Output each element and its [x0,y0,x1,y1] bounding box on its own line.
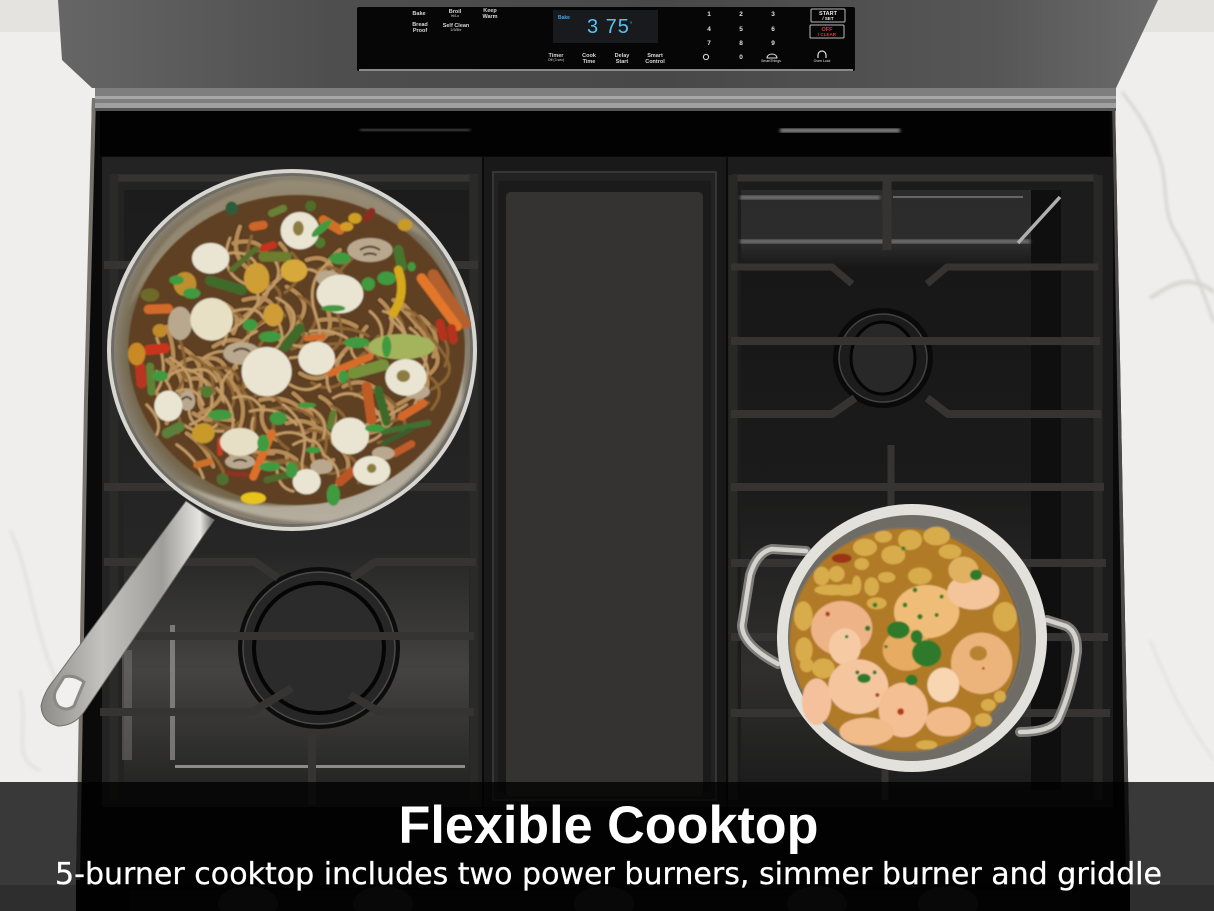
mode button labels: Smart [647,53,663,59]
squid tentacles [168,238,430,474]
keypad: 9 [771,40,775,47]
mode button labels: Keep [483,8,497,14]
garlic pieces [794,527,1017,750]
mode button labels: Control [645,59,665,65]
burner: left front power burner [238,567,400,729]
temperature display [553,10,658,43]
scallops [154,212,427,494]
keypad: 7 [707,40,711,47]
pot rim [777,504,1047,772]
subtitle: 5-burner cooktop includes two power burners, simmer burner and griddle [55,857,1162,892]
temperature display: Bake [558,15,570,21]
mode button labels: Cook [582,53,597,59]
mode button labels: 2/3/5hr [451,28,462,32]
pot handles [742,549,1077,732]
mode button labels: Proof [413,28,427,34]
knobs row [130,886,1080,911]
front trim strip [95,88,1116,156]
griddle [484,157,726,807]
start and off buttons [810,9,845,38]
pan rim [107,169,477,531]
mode button labels: Self Clean [443,23,470,29]
keypad: 0 [739,54,743,61]
mode button labels: Off (3 sec) [548,58,564,62]
keypad: 1 [707,11,711,18]
mode button labels: Bread [412,22,428,28]
pan food [128,195,465,506]
keypad [703,11,831,63]
start and off buttons: / SET [822,16,834,21]
title: Flexible Cooktop [398,796,818,855]
right grate [731,175,1110,800]
pan with noodle stir-fry [41,169,477,726]
noodles [157,227,438,480]
left grate [100,175,478,805]
keypad: 4 [707,26,711,33]
parsley [845,546,982,685]
right burner well [728,157,1113,807]
mode button labels: Time [583,59,595,65]
vegetables [140,208,465,482]
keypad: Oven Lock [814,59,831,63]
mode button labels [412,8,665,65]
control panel [357,7,855,71]
keypad: SmartThings [761,59,781,63]
left burner well [102,157,482,807]
temperature display: 3 75 [587,16,630,38]
shrimp [802,557,1012,746]
food base [128,195,465,505]
mode button labels: Timer [549,53,564,59]
mode button labels: Bake [412,11,426,17]
start and off buttons: OFF [822,27,833,33]
start and off buttons: START [819,11,838,17]
caption band [0,782,1214,911]
pot food [790,527,1020,752]
keypad: 8 [739,40,743,47]
mode button labels: Warm [482,14,498,20]
pan sheen [175,340,466,522]
keypad: 2 [739,11,743,18]
mode button labels: Broil [449,9,462,15]
keypad: 6 [771,26,775,33]
herbs [152,202,416,506]
pot with garlic shrimp [742,504,1077,772]
start and off buttons: / CLEAR [818,32,837,37]
mode button labels: Hi/Lo [451,14,459,18]
burner: right rear simmer burner [833,308,933,408]
pan handle [41,501,214,726]
mode button labels: Start [616,59,628,65]
temperature display: ° [630,22,633,28]
mode button labels: Delay [615,53,630,59]
cooktop body [76,98,1130,911]
range back panel [58,0,1158,88]
keypad: 5 [739,26,743,33]
keypad: 3 [771,11,775,18]
